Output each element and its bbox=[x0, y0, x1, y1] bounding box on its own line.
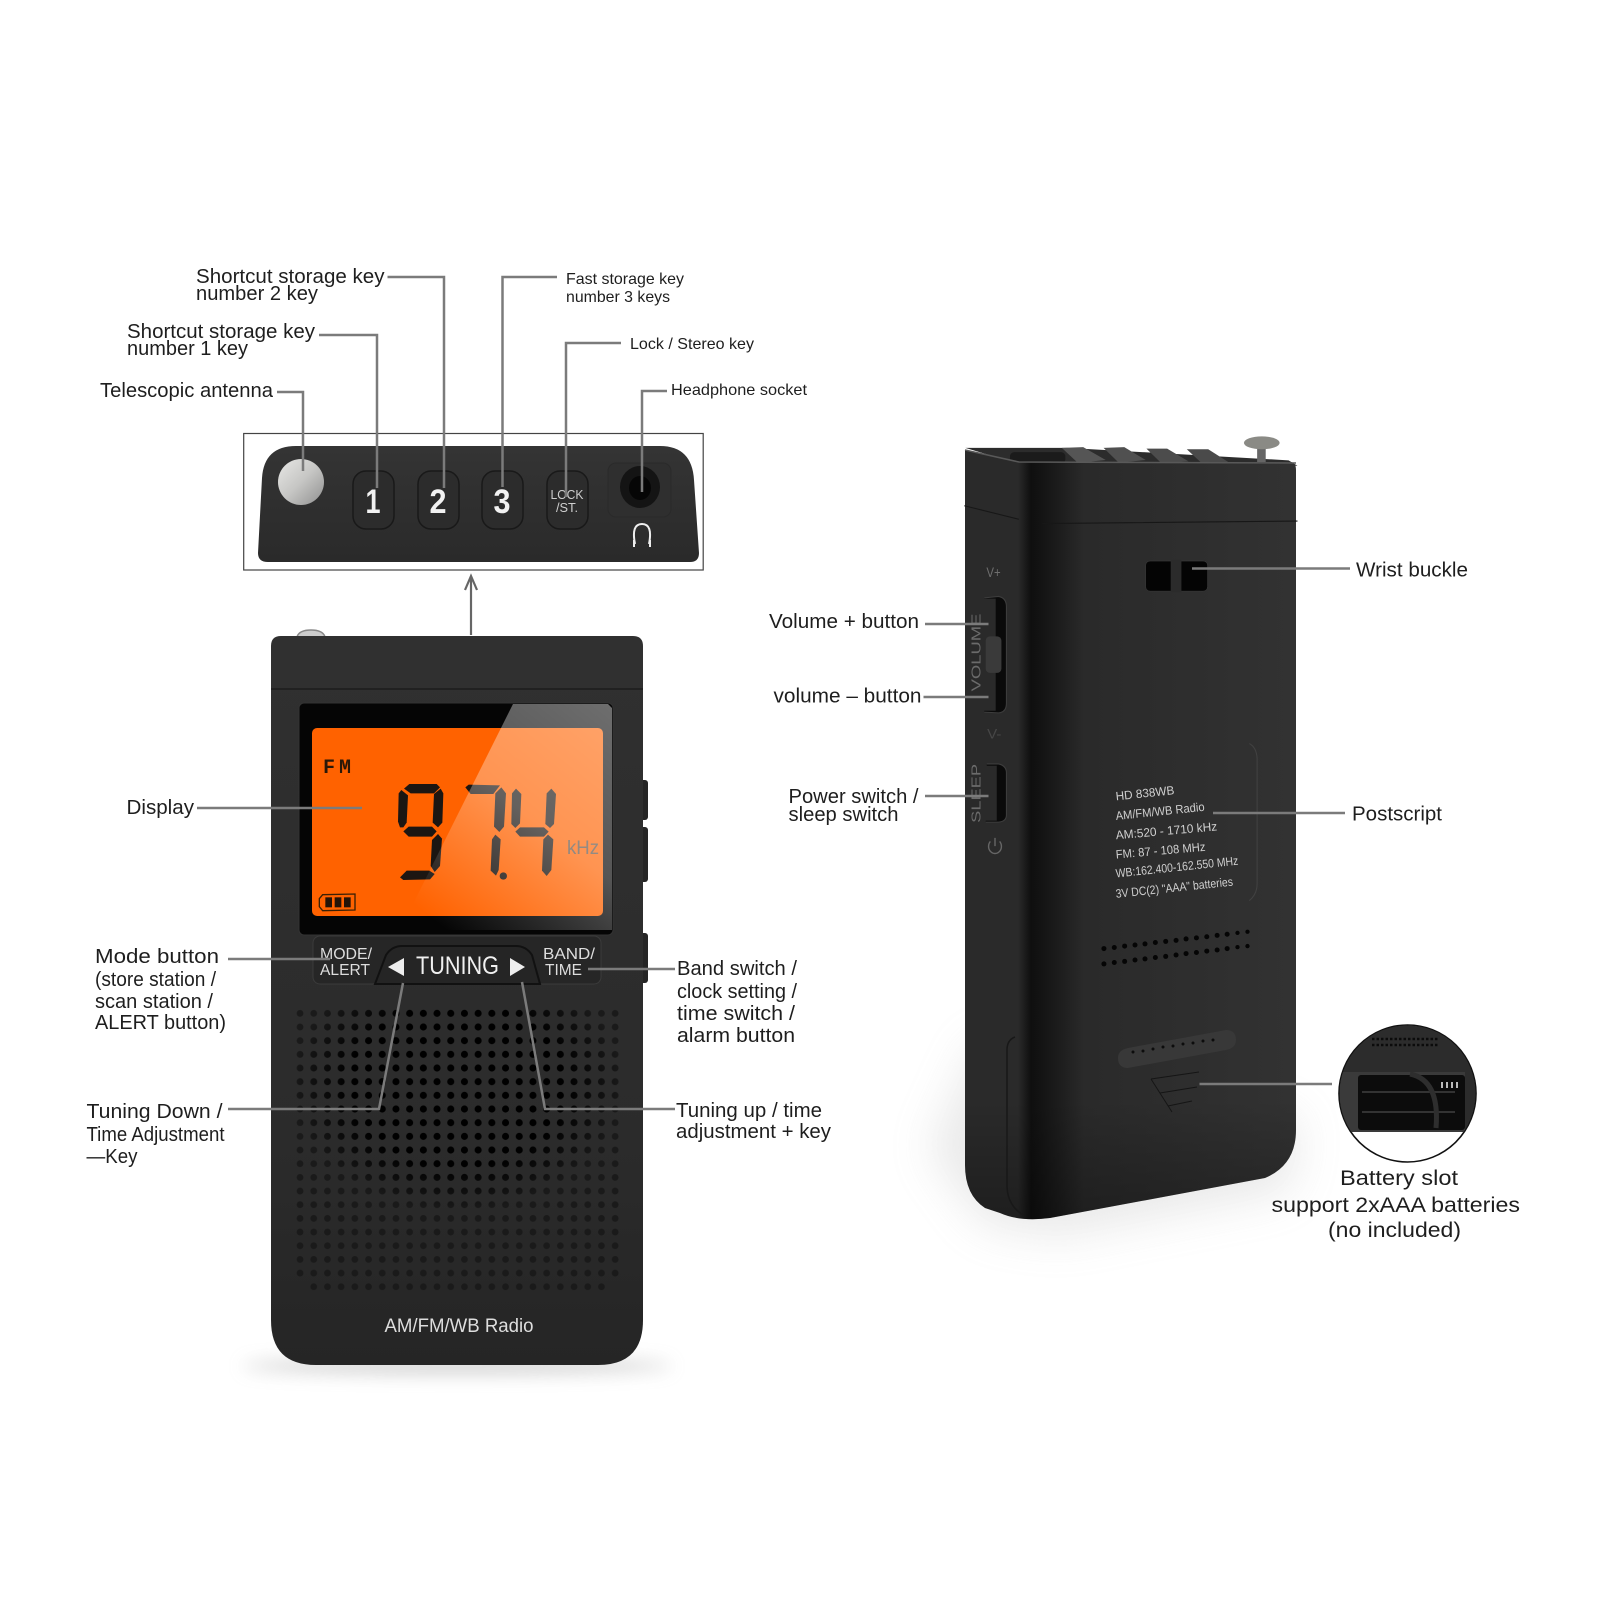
panel: top view of radio bbox=[244, 434, 703, 570]
screen gloss bbox=[400, 704, 612, 930]
key 1: 1 bbox=[366, 483, 380, 521]
callout: tuning down: —Key bbox=[86, 1146, 138, 1168]
callout: shortcut key 1 bbox=[127, 321, 377, 488]
callout: fast storage key bbox=[502, 271, 684, 487]
callout: mode button bbox=[95, 946, 330, 1034]
callout: headphone socket: Headphone socket bbox=[671, 382, 808, 399]
callout: tuning down bbox=[86, 983, 403, 1168]
callout: power switch bbox=[788, 786, 988, 826]
model label: AM/FM/WB Radio bbox=[384, 1316, 534, 1337]
postscript print: AM/FM/WB Radio bbox=[1115, 800, 1205, 823]
postscript print: FM: 87 - 108 MHz bbox=[1115, 840, 1206, 862]
callout: battery slot bbox=[1200, 1084, 1520, 1242]
postscript print: HD 838WB bbox=[1115, 783, 1175, 803]
callout: tuning up: Tuning up / time bbox=[676, 1100, 822, 1122]
v plus: V+ bbox=[986, 565, 1001, 580]
band label: TIME bbox=[545, 962, 582, 979]
key 1 bbox=[353, 471, 394, 529]
callout: band switch: alarm button bbox=[677, 1025, 795, 1047]
key lock: LOCK bbox=[550, 488, 584, 502]
callout: telescopic antenna: Telescopic antenna bbox=[100, 380, 274, 402]
fm indicator: FM bbox=[323, 757, 351, 780]
callout: telescopic antenna bbox=[100, 380, 303, 471]
icon: power bbox=[989, 838, 1001, 854]
key 2 bbox=[418, 471, 459, 529]
icon: headphones bbox=[634, 524, 650, 547]
button panel bbox=[313, 936, 601, 984]
left arrow bbox=[388, 958, 404, 976]
antenna tip bbox=[278, 459, 324, 505]
callout: tuning up: adjustment + key bbox=[676, 1121, 831, 1143]
callout: volume minus: volume – button bbox=[774, 686, 922, 708]
callout: lock stereo key bbox=[566, 336, 754, 497]
callout: mode button: Mode button bbox=[95, 946, 219, 968]
callout: shortcut key 1: number 1 key bbox=[127, 338, 248, 360]
khz unit: kHz bbox=[567, 838, 599, 859]
callout: shortcut key 2: Shortcut storage key bbox=[196, 266, 384, 288]
top face and keys bbox=[965, 436, 1297, 466]
top highlight bbox=[965, 450, 1296, 463]
callout: band switch: Band switch / bbox=[677, 958, 797, 980]
headphone socket bbox=[608, 463, 671, 517]
body bbox=[271, 636, 643, 1365]
callout: power switch: Power switch / bbox=[788, 786, 919, 808]
rear speaker holes bbox=[1101, 930, 1250, 966]
cap seam bbox=[964, 506, 1297, 524]
callout: tuning down: Tuning Down / bbox=[86, 1101, 223, 1123]
callout: shortcut key 2: number 2 key bbox=[196, 283, 318, 305]
callout: power switch: sleep switch bbox=[788, 804, 898, 826]
battery indicator bbox=[319, 894, 355, 911]
sleep switch bbox=[983, 764, 1006, 822]
key lock bbox=[547, 471, 588, 529]
battery door latch bbox=[1118, 1030, 1236, 1068]
callout: battery slot: (no included) bbox=[1328, 1219, 1461, 1242]
tuning button bbox=[375, 946, 540, 984]
callout: band switch: time switch / bbox=[677, 1003, 795, 1025]
key lock: /ST. bbox=[556, 501, 578, 515]
band label bbox=[543, 946, 596, 979]
speaker grille bbox=[293, 1006, 622, 1294]
callout: shortcut key 2 bbox=[196, 266, 444, 488]
key 2: 2 bbox=[430, 483, 446, 521]
callout: mode button: scan station / bbox=[95, 991, 213, 1013]
volume rocker bbox=[983, 596, 1006, 713]
callout: mode button: (store station / bbox=[95, 969, 216, 991]
mode label bbox=[320, 946, 373, 979]
label recess bbox=[1249, 744, 1257, 901]
wrist buckle bbox=[1146, 560, 1207, 592]
postscript print: WB:162.400-162.550 MHz bbox=[1115, 854, 1239, 880]
battery inset circle bbox=[1335, 1020, 1480, 1162]
body bbox=[965, 450, 1296, 1219]
cap line bbox=[271, 688, 643, 690]
arrow: from radio up to top panel bbox=[465, 576, 477, 635]
lcd bbox=[312, 728, 603, 916]
v minus: V- bbox=[987, 727, 1001, 742]
display bbox=[299, 703, 613, 935]
callout: mode button: ALERT button) bbox=[95, 1012, 226, 1034]
shadow: front radio bbox=[242, 1359, 672, 1373]
key 3: 3 bbox=[494, 483, 510, 521]
digits bbox=[398, 784, 556, 880]
volume text: VOLUME bbox=[969, 613, 984, 691]
sleep text: SLEEP bbox=[969, 764, 984, 823]
antenna top bbox=[297, 630, 325, 637]
postscript print: AM:520 - 1710 kHz bbox=[1115, 819, 1218, 842]
callout: band switch bbox=[588, 958, 797, 1047]
callout: volume plus: Volume + button bbox=[769, 611, 919, 633]
key 3 bbox=[482, 471, 523, 529]
mode label: ALERT bbox=[320, 962, 370, 979]
postscript print: 3V DC(2) "AAA" batteries bbox=[1115, 875, 1234, 901]
latch arrow marks bbox=[1151, 1072, 1199, 1112]
shadow: back radio bbox=[930, 1040, 1300, 1236]
callout: battery slot: support 2xAAA batteries bbox=[1272, 1194, 1520, 1217]
band label: BAND/ bbox=[543, 946, 596, 963]
callout: postscript: Postscript bbox=[1352, 804, 1442, 826]
front radio bbox=[271, 630, 648, 1365]
antenna head bbox=[1257, 446, 1266, 462]
callout: battery slot: Battery slot bbox=[1340, 1167, 1458, 1190]
callout: lock stereo key: Lock / Stereo key bbox=[630, 336, 754, 353]
callout: fast storage key: number 3 keys bbox=[566, 289, 670, 306]
callout: band switch: clock setting / bbox=[677, 981, 797, 1003]
side buttons bbox=[640, 780, 648, 983]
callout: tuning down: Time Adjustment bbox=[86, 1124, 225, 1146]
mode label: MODE/ bbox=[320, 946, 373, 963]
callout: shortcut key 1: Shortcut storage key bbox=[127, 321, 315, 343]
back radio bbox=[964, 436, 1297, 1219]
callout: display: Display bbox=[126, 797, 194, 819]
callout: tuning up bbox=[522, 982, 831, 1143]
callout: wrist buckle: Wrist buckle bbox=[1356, 560, 1468, 582]
postscript print bbox=[1115, 783, 1239, 901]
battery door seam bbox=[1007, 1037, 1023, 1215]
tuning text: TUNING bbox=[416, 952, 499, 980]
callout: fast storage key: Fast storage key bbox=[566, 271, 684, 288]
top plate bbox=[258, 446, 699, 562]
right arrow bbox=[510, 958, 525, 976]
callout: headphone socket bbox=[642, 382, 808, 492]
